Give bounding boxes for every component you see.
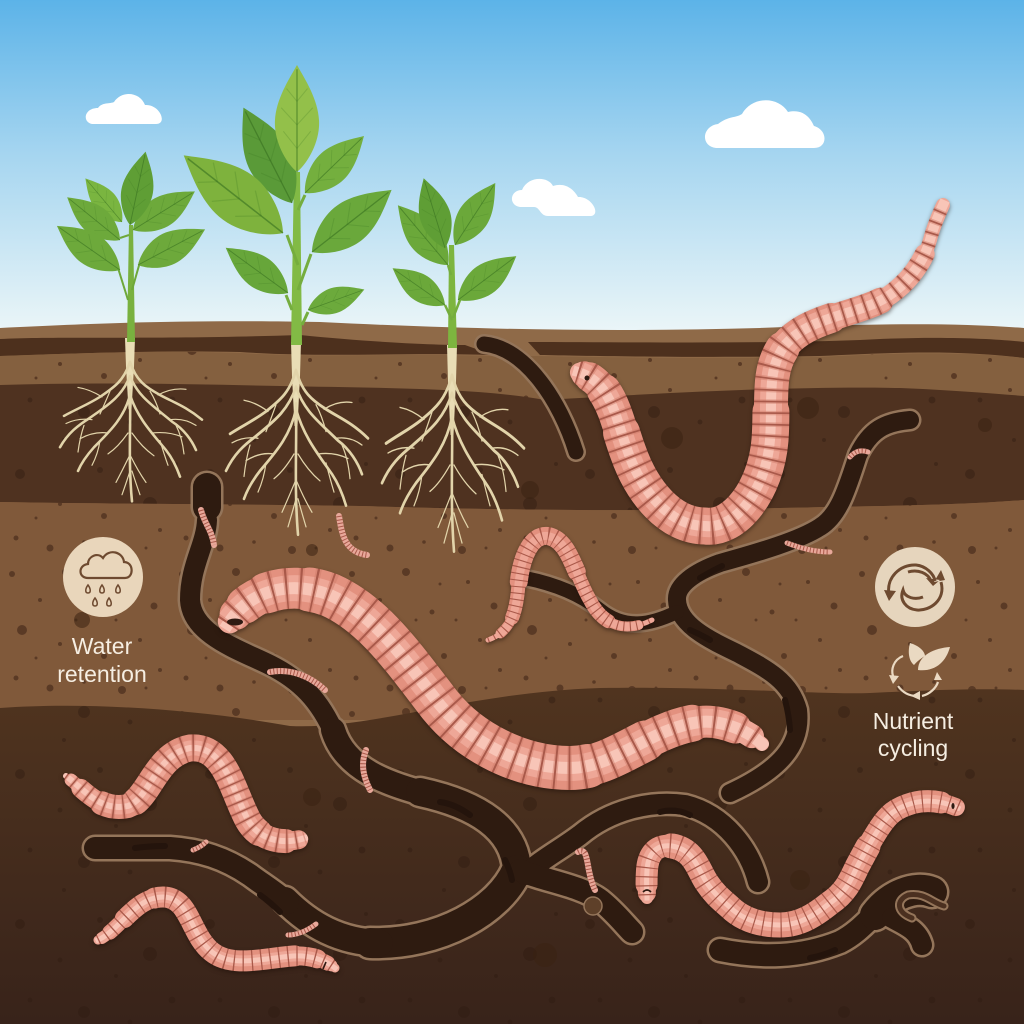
cloud: left (86, 94, 162, 124)
worm: lower right (643, 801, 958, 925)
label: nutrient cycling: cycling (878, 735, 948, 761)
worm: lower left upper (66, 748, 305, 841)
worm: lower left bottom (98, 897, 335, 969)
burrow network (95, 344, 944, 958)
plant: centre (167, 65, 405, 535)
worm: upper right large (578, 205, 943, 526)
cloud: right (705, 100, 824, 148)
sky background (0, 0, 1024, 340)
icon: water retention (63, 537, 143, 617)
roots (382, 345, 524, 551)
icon: cycle arrows (875, 547, 955, 627)
worm: centre arched (488, 536, 652, 640)
label: nutrient cycling: Nutrient (873, 708, 954, 734)
plant: left (48, 148, 213, 501)
soil layers (0, 321, 1024, 1024)
icon: nutrient leaf cycle (889, 643, 950, 700)
roots (60, 338, 202, 501)
label: water retention: Water (72, 633, 133, 659)
label: water retention: retention (57, 661, 147, 687)
small worms (193, 451, 868, 935)
worm: centre large (227, 588, 762, 768)
plant: right (382, 174, 526, 551)
roots (226, 342, 368, 535)
cloud: centre (512, 179, 595, 216)
